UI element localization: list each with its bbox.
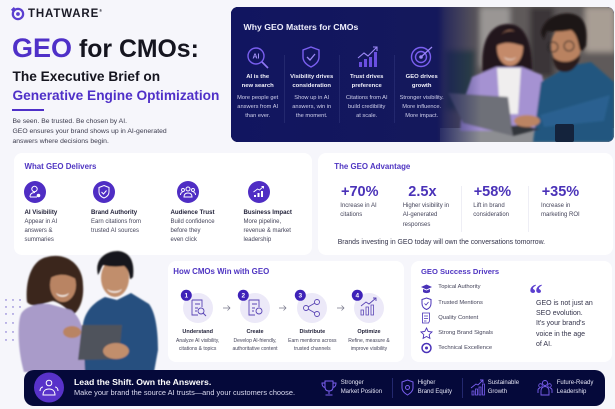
benefit 3: Sustainable	[488, 380, 519, 386]
laptop and hands	[448, 93, 513, 136]
banner headline: Lead the Shift. Own the Answers.	[74, 377, 211, 387]
item: AI visibility: AI Visibility	[24, 208, 57, 216]
benefit 3: Growth	[488, 389, 507, 395]
item: brand authority: trusted AI sources	[91, 228, 139, 234]
step 1: Understand	[182, 328, 213, 334]
column 3: trust	[346, 46, 388, 119]
panel: GEO success drivers	[411, 261, 612, 362]
stat: 2.5x	[402, 184, 449, 228]
column 3: trust: preference	[352, 83, 382, 89]
photo: two colleagues at laptop	[231, 7, 614, 142]
stat: +35%: marketing ROI	[541, 212, 580, 218]
stat: +70%	[340, 184, 378, 218]
icon: quote mark: “	[529, 279, 542, 309]
column 2: visibility: answers, win in	[292, 104, 331, 110]
step 3: 3	[299, 293, 303, 300]
step 1	[176, 290, 219, 352]
step 2: 2	[241, 293, 245, 300]
heading: What GEO Delivers	[24, 162, 96, 170]
column 2: visibility: the moment.	[296, 113, 327, 119]
column 3: trust: at scale.	[356, 113, 377, 119]
driver list: Trusted Mentions	[438, 300, 483, 306]
column 4: growth: Stronger visibility.	[400, 95, 444, 101]
stat: +35%: +35%	[542, 184, 579, 200]
step 4: improve visibility	[351, 346, 387, 352]
column 1: AI is the new search: More people get	[237, 95, 278, 101]
step 4: Refine, measure &	[348, 338, 390, 344]
item: business impact: leadership	[244, 237, 271, 243]
driver list: Quality Content	[438, 315, 478, 321]
intro text: GEO ensures your brand shows up in AI-generated	[12, 128, 167, 135]
panel: how CMOs win	[168, 261, 404, 362]
item: audience trust: Audience Trust	[170, 208, 215, 216]
step 4	[348, 290, 390, 352]
item: AI visibility: answers &	[24, 228, 53, 234]
panel: what GEO delivers	[14, 153, 312, 255]
item: AI visibility: Appear in AI	[24, 219, 57, 225]
banner subline: Make your brand the source AI trusts—and your customers choose.	[74, 388, 295, 397]
column 3: trust: Trust drives	[350, 74, 383, 80]
arrow	[279, 305, 286, 311]
benefit 4	[538, 380, 594, 396]
icon: target	[410, 46, 432, 68]
stat: +58%: consideration	[473, 212, 509, 218]
quote	[536, 300, 593, 348]
column 4: growth: growth	[412, 83, 432, 89]
intro text: Be seen. Be trusted. Be chosen by AI.	[12, 118, 127, 125]
item: business impact	[244, 181, 292, 243]
stat: +58%: +58%	[474, 184, 511, 200]
step 2: Create	[246, 328, 264, 334]
step 2: Develop AI-friendly,	[234, 338, 276, 344]
driver list: Strong Brand Signals	[438, 330, 493, 336]
item: business impact: Business Impact	[244, 208, 292, 216]
stat: 2.5x: 2.5x	[408, 184, 437, 200]
stat: 2.5x: responses	[403, 222, 430, 228]
icon: shield	[302, 46, 320, 68]
item: brand authority: Earn citations from	[91, 219, 141, 225]
benefit 2: Higher	[418, 380, 435, 386]
column 4: growth: More influence.	[402, 104, 441, 110]
quote: It's your brand's	[536, 320, 585, 327]
icon: group badge	[34, 372, 64, 402]
column 1: AI is the new search: AI is the	[246, 74, 269, 80]
heading: GEO Success Drivers	[421, 267, 499, 276]
item: brand authority	[91, 181, 141, 234]
step 3: Distribute	[299, 328, 325, 334]
item: audience trust: Build confidence	[170, 219, 215, 225]
column 2: visibility: Visibility drives	[290, 74, 333, 80]
column 3: trust: Citations from AI	[346, 95, 388, 101]
intro text: answers where decisions begin.	[12, 138, 109, 145]
step 3	[288, 290, 336, 352]
intro text	[12, 118, 167, 145]
item: brand authority: Brand Authority	[91, 208, 137, 216]
item: AI visibility: summaries	[24, 237, 54, 243]
column 4: growth	[400, 46, 444, 119]
icon: person	[24, 181, 46, 203]
icon: chart	[248, 181, 270, 203]
stat: +58%	[473, 184, 511, 218]
step 2	[232, 290, 278, 352]
quote: GEO is not just an	[536, 300, 593, 306]
benefit 2: Brand Equity	[418, 389, 452, 395]
item: audience trust: before they	[170, 228, 201, 234]
item: business impact: revenue & market	[244, 228, 291, 234]
step 1: citations & topics	[179, 346, 216, 352]
benefit 1: Market Position	[341, 389, 382, 395]
column 4: growth: More impact.	[405, 113, 438, 119]
benefit 4: Leadership	[557, 389, 586, 395]
subtitle accent: Generative Engine Optimization	[12, 88, 219, 102]
column 1: AI is the new search	[237, 47, 278, 119]
column 1: AI is the new search: new search	[242, 83, 274, 89]
panel: the GEO advantage	[318, 153, 613, 255]
benefit 4: Future-Ready	[557, 380, 593, 386]
stat: +70%: Increase in AI	[340, 203, 377, 209]
driver list: Topical Authority	[438, 284, 481, 290]
icon: shield	[93, 181, 115, 203]
benefit 2	[402, 380, 452, 396]
step 3: trusted channels	[294, 346, 331, 352]
column 2: visibility: Show up in AI	[294, 95, 329, 101]
step 4: 4	[355, 293, 359, 300]
arrow	[223, 305, 230, 311]
stat: +35%	[541, 184, 580, 218]
title: GEO for CMOs:	[12, 33, 199, 63]
panel: why GEO matters	[231, 7, 614, 142]
stat: +58%: Lift in brand	[473, 203, 505, 209]
column 3: trust: build credibility	[348, 104, 385, 110]
column 1: AI is the new search: than ever.	[245, 113, 270, 119]
woman	[482, 24, 532, 79]
item: AI visibility	[24, 181, 58, 243]
step 3: Earn mentions across	[288, 338, 336, 344]
banner	[24, 370, 605, 406]
heading: The GEO Advantage	[334, 162, 410, 170]
man	[533, 62, 614, 142]
photo: two people with tablet	[5, 250, 160, 373]
quote: SEO evolution.	[536, 310, 583, 317]
dot pattern	[5, 299, 21, 341]
benefit 3	[470, 380, 519, 396]
benefit 1: Stronger	[341, 380, 364, 386]
stat: +35%: Increase in	[541, 203, 570, 209]
column 1: AI is the new search: answers from AI	[237, 104, 278, 110]
closing statement: Brands investing in GEO today will own the conversations tomorrow.	[338, 239, 545, 246]
item: audience trust: even click	[170, 237, 197, 243]
column 2: visibility	[290, 46, 334, 119]
arrow	[337, 305, 344, 311]
stat: 2.5x: AI-generated	[403, 212, 437, 218]
subtitle: The Executive Brief on	[12, 68, 160, 84]
quote: voice in the age	[536, 331, 585, 338]
icon: AI magnifier	[247, 47, 268, 68]
icon: bars with arrow	[358, 46, 378, 67]
stat: +70%: +70%	[341, 184, 378, 200]
item: audience trust	[170, 181, 215, 243]
step 2: authoritative content	[232, 346, 278, 352]
column 2: visibility: consideration	[292, 83, 331, 89]
step 1: Analyze AI visibility,	[176, 338, 219, 344]
stat: 2.5x: Higher visibility in	[403, 203, 449, 209]
step 4: Optimize	[357, 328, 381, 334]
heading: Why GEO Matters for CMOs	[244, 22, 358, 32]
heading: How CMOs Win with GEO	[173, 267, 269, 276]
column 4: growth: GEO drives	[406, 74, 438, 80]
stat: +70%: citations	[340, 212, 362, 218]
icon: AI magnifier: AI	[252, 53, 260, 60]
logo: THATWARE®	[28, 8, 103, 20]
driver list: Technical Excellence	[438, 345, 492, 351]
icon: group	[177, 181, 199, 203]
step 1: 1	[184, 293, 188, 300]
driver list	[420, 284, 493, 354]
quote: of AI.	[536, 341, 552, 348]
item: business impact: More pipeline,	[244, 219, 281, 225]
benefit 1	[322, 380, 382, 396]
